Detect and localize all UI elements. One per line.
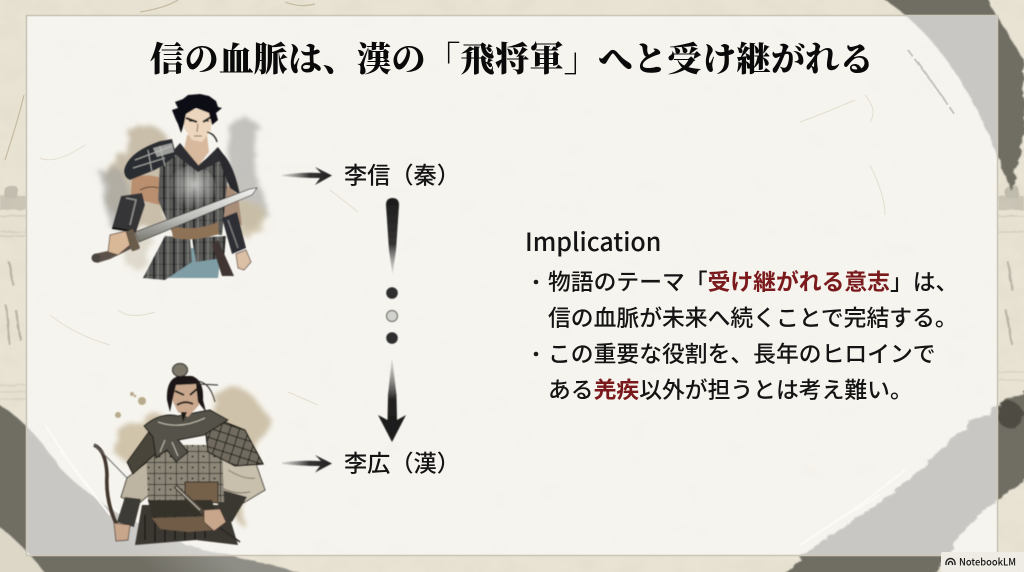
belt (148, 500, 216, 517)
right pauldron (205, 422, 263, 466)
illustration: 李信 warrior with sword (92, 94, 268, 280)
ink wash behind general (112, 386, 272, 525)
topknot (172, 364, 188, 376)
NotebookLM badge (941, 552, 1024, 572)
NotebookLM badge: NotebookLM (959, 554, 1016, 568)
left sleeve (121, 460, 155, 505)
right arm (222, 180, 242, 225)
brush arrow: lineage continues downward (378, 357, 406, 442)
scarf (144, 410, 228, 462)
torso armor (158, 150, 228, 235)
left hand (108, 231, 130, 255)
spiky black hair (172, 94, 222, 133)
left bracer (117, 497, 141, 527)
decoration: faded scroll ornaments at right edge (998, 186, 1024, 380)
right bracer (216, 490, 247, 522)
right hand (236, 250, 251, 270)
implication block (525, 223, 958, 405)
face (172, 382, 199, 417)
left hand on bow (114, 523, 130, 541)
ink dots (386, 287, 398, 344)
ink brush sweep: top right (878, 0, 1024, 192)
sword hilt (94, 240, 135, 263)
hair (167, 376, 206, 412)
neck (184, 135, 209, 166)
hair strand (197, 381, 218, 402)
left arm (130, 175, 165, 207)
heading: Implication: Implication (525, 223, 661, 259)
armored skirt (143, 236, 192, 280)
illustration: 李広 general with bow (94, 364, 272, 545)
bullet 1: 物語のテーマ「受け継がれる意志」は、 (548, 264, 958, 297)
bullet 1: 信の血脈が未来へ続くことで完結する。 (548, 300, 958, 333)
belt sash (171, 222, 219, 239)
bullet 2: この重要な役割を、長年のヒロインで (548, 336, 936, 369)
splatter dots (115, 392, 146, 418)
brush stroke: lineage line top (386, 198, 399, 275)
sword blade (135, 188, 257, 242)
left pauldron (124, 139, 176, 180)
ink brush sweep: bottom right (775, 390, 1024, 572)
arrow: to 李広 (282, 455, 332, 472)
sword hilt at waist (175, 486, 208, 517)
bullet 2: ある羌疾以外が担うとは考え難い。 (548, 372, 913, 405)
bullet 1 (534, 264, 958, 333)
decoration: faded scroll ornaments at left edge (0, 186, 26, 399)
blue trousers (168, 245, 222, 278)
armored skirt (135, 505, 238, 545)
face (183, 108, 212, 142)
left bracer (112, 193, 145, 232)
right pauldron (216, 148, 240, 195)
chest plate detail (185, 482, 218, 503)
label: 李広（漢）: 李広（漢） (344, 444, 460, 478)
torso armor (146, 445, 224, 502)
label: 李信（秦）: 李信（秦） (344, 156, 460, 190)
left pauldron (127, 430, 162, 474)
bullet 2 (534, 336, 936, 405)
right bracer (222, 212, 246, 254)
right hand on sword (204, 509, 226, 531)
title: 信の血脈は、漢の「飛将軍」へと受け継がれる (150, 32, 874, 81)
right sleeve (212, 455, 265, 505)
bow (94, 445, 121, 533)
ink wash behind warrior (100, 119, 268, 268)
ink brush sweep: bottom left (0, 402, 325, 572)
arrow: to 李信 (282, 167, 332, 185)
